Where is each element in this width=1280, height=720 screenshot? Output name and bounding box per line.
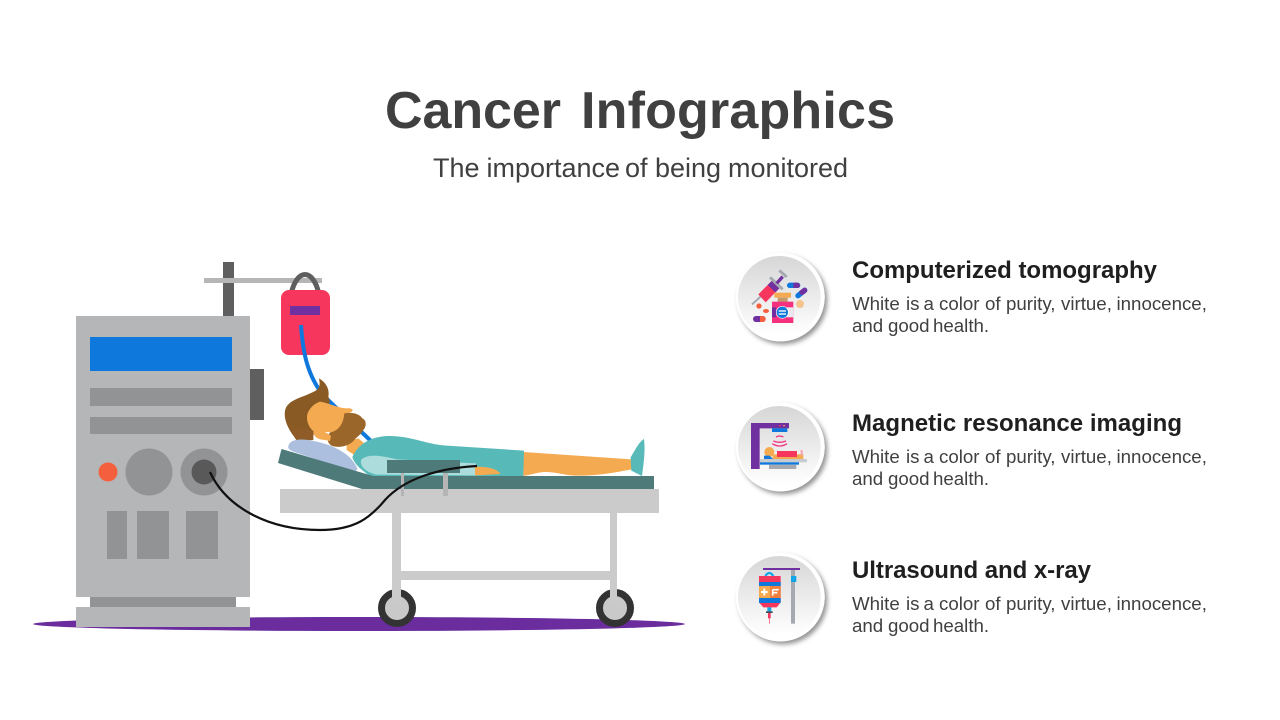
description: is <box>906 293 925 314</box>
item: ultrasound and x-ray <box>736 553 1207 641</box>
heading: Computerized tomography <box>852 257 1158 284</box>
IV bag <box>281 274 330 355</box>
description: good <box>888 315 935 336</box>
patient body <box>288 436 645 476</box>
icon: medicine <box>736 253 825 341</box>
description: White <box>852 593 905 614</box>
machine <box>76 316 264 627</box>
description: and <box>852 468 888 489</box>
heading: Ultrasound and x-ray <box>852 557 1092 584</box>
description: color <box>939 293 985 314</box>
description: a <box>924 593 939 614</box>
description: is <box>906 446 925 467</box>
subtitle: of <box>625 153 655 183</box>
description: of <box>985 593 1006 614</box>
patient head <box>285 378 366 455</box>
monitor cable <box>210 466 477 530</box>
description: innocence, <box>1116 593 1207 614</box>
title <box>385 82 895 140</box>
description: White <box>852 446 905 467</box>
description: health. <box>933 468 989 489</box>
bed frame <box>278 449 654 496</box>
subtitle: importance <box>486 153 628 183</box>
description: and <box>852 615 888 636</box>
item: magnetic resonance imaging <box>736 403 1207 491</box>
IV tube <box>301 325 372 442</box>
description: is <box>906 593 925 614</box>
description: White <box>852 293 905 314</box>
description: health. <box>933 315 989 336</box>
description: purity, <box>1006 293 1061 314</box>
description: of <box>985 446 1006 467</box>
IV pole <box>204 262 322 317</box>
subtitle: monitored <box>728 153 848 183</box>
description: a <box>924 293 939 314</box>
heading: Magnetic resonance imaging <box>852 410 1182 437</box>
icon: scanner <box>736 403 825 491</box>
floor shadow <box>33 617 685 631</box>
description: innocence, <box>1116 446 1207 467</box>
description: virtue, <box>1061 446 1117 467</box>
subtitle: being <box>655 153 729 183</box>
icon: drip bag <box>736 553 825 641</box>
illustration: patient monitoring <box>33 262 685 631</box>
title: Cancer <box>385 82 561 140</box>
description: good <box>888 615 935 636</box>
description: innocence, <box>1116 293 1207 314</box>
pillow <box>288 440 357 471</box>
description: virtue, <box>1061 293 1117 314</box>
description: and <box>852 315 888 336</box>
gown <box>352 436 524 476</box>
description: good <box>888 468 935 489</box>
description: purity, <box>1006 446 1061 467</box>
title: Infographics <box>581 82 895 140</box>
description: virtue, <box>1061 593 1117 614</box>
foot <box>631 439 645 476</box>
description: color <box>939 593 985 614</box>
description: health. <box>933 615 989 636</box>
description: of <box>985 293 1006 314</box>
description: purity, <box>1006 593 1061 614</box>
legs <box>523 452 632 476</box>
description: a <box>924 446 939 467</box>
hand <box>475 467 501 475</box>
bed <box>280 489 659 624</box>
item: computerized tomography <box>736 253 1207 341</box>
arm <box>361 456 476 475</box>
subtitle: The <box>433 153 487 183</box>
description: color <box>939 446 985 467</box>
